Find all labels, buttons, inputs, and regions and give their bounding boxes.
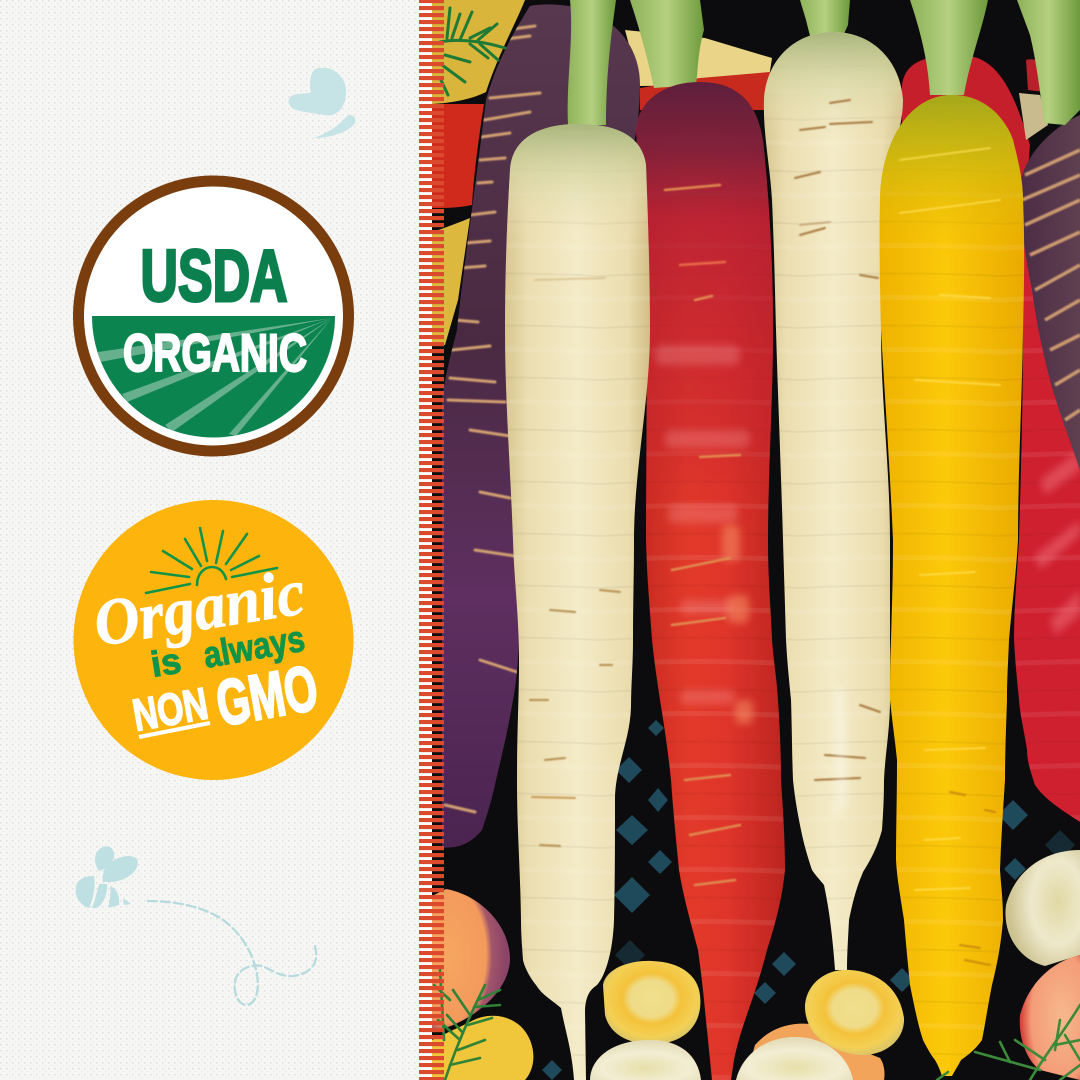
dashed flight trail	[148, 901, 316, 1005]
white slice right	[1005, 850, 1080, 966]
dill sprig bottom left	[434, 970, 500, 1080]
stems	[568, 0, 1080, 125]
badge script: Organic: Organic	[89, 556, 310, 661]
badge text: always: always	[200, 618, 308, 676]
yellow carrot behind top center	[625, 30, 772, 86]
badge text: GMO: GMO	[211, 651, 323, 740]
dill sprig bottom right	[937, 1005, 1080, 1080]
seal text: ORGANIC: ORGANIC	[123, 324, 307, 383]
icon: rising sun	[146, 528, 277, 593]
panel: carrot photograph	[432, 0, 1080, 1080]
yellow carrot	[875, 95, 1025, 1080]
pink slice right	[1020, 955, 1080, 1080]
icon: bee with dashed flight trail	[76, 846, 316, 1005]
seal ring	[78, 181, 348, 451]
yellow slice center right	[805, 970, 904, 1055]
badge: Organic is always Non GMO	[74, 500, 354, 780]
carrot slices	[432, 850, 1080, 1080]
white carrot 1	[505, 124, 650, 1080]
badge text: is: is	[148, 640, 184, 685]
yellow slice center left	[603, 961, 700, 1044]
badge underline	[139, 723, 210, 737]
dark grill background	[432, 0, 1080, 1080]
icon: butterfly	[289, 68, 356, 138]
yellow carrot behind top left	[432, 0, 525, 104]
yellow carrot behind left	[432, 218, 470, 345]
badge text: NON: NON	[129, 678, 212, 741]
purple and orange slice	[432, 889, 510, 1028]
purple carrot right	[1020, 115, 1080, 470]
orange slice	[745, 1024, 885, 1080]
purple carrot left	[442, 4, 640, 848]
red carrot 1	[630, 82, 785, 1080]
yellow slice bottom left	[432, 1016, 533, 1080]
badge circle	[74, 500, 354, 780]
badge: USDA Organic seal	[78, 181, 348, 451]
white slice center right	[736, 1037, 853, 1080]
seal heading: USDA: USDA	[140, 236, 288, 317]
red carrot right	[1014, 244, 1080, 822]
red carrot behind top left	[432, 104, 484, 208]
bee	[76, 846, 138, 908]
white carrot 2	[760, 32, 905, 972]
seal green field	[92, 316, 335, 438]
red carrot behind top right	[902, 56, 1030, 180]
pale carrot behind far right	[1019, 93, 1048, 140]
red carrot behind top center	[640, 72, 770, 110]
red carrot behind far right	[1026, 59, 1040, 92]
panel: linen background	[0, 0, 420, 1080]
white slice center left	[590, 1040, 701, 1080]
dill sprig top left	[440, 8, 505, 95]
decorative red zipper edge	[419, 0, 444, 1080]
